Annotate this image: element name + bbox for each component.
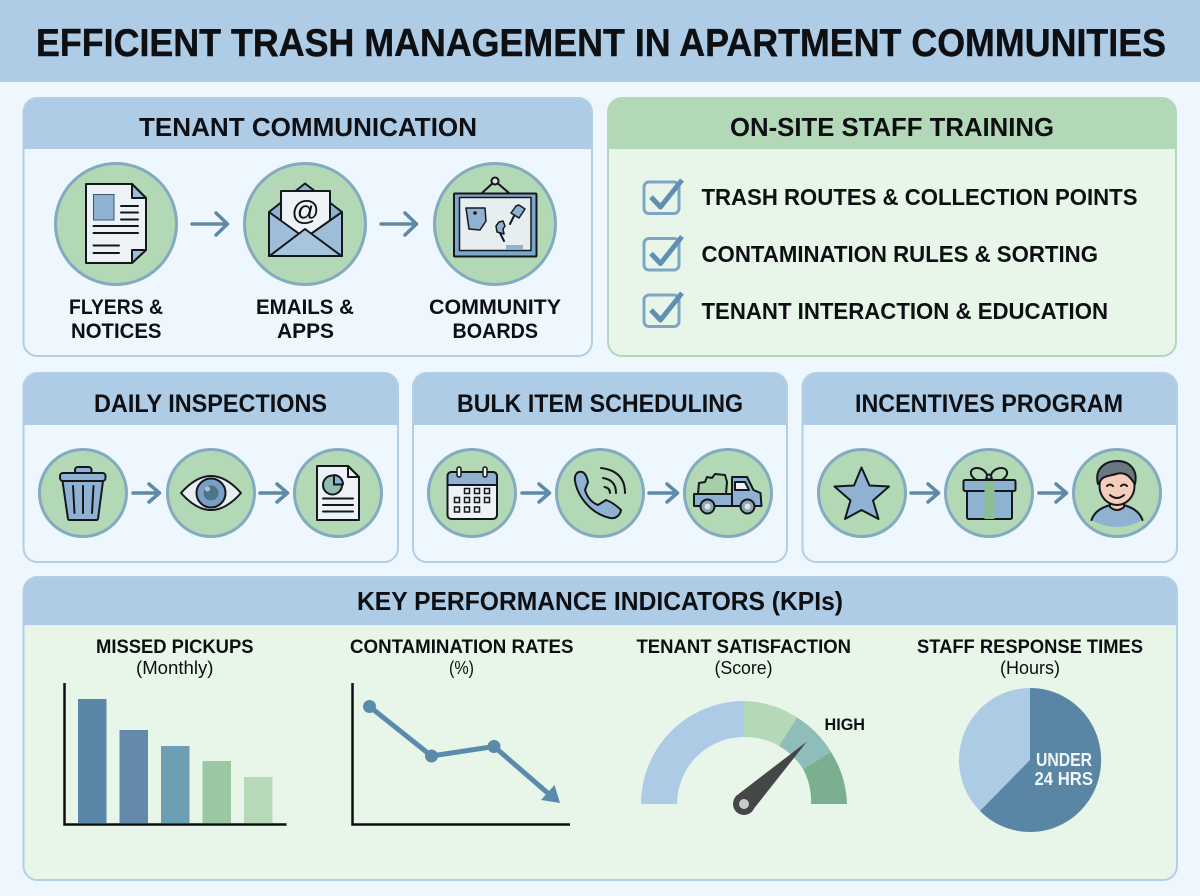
icon: emails and apps: [244, 164, 366, 284]
title banner: [0, 0, 1200, 82]
icon: community boards: [434, 164, 556, 284]
kpi title: tenant satisfaction: TENANT SATISFACTION: [636, 636, 851, 658]
heading: tenant communication: TENANT COMMUNICATION: [139, 112, 477, 142]
checklist item: trash routes: TRASH ROUTES & COLLECTION POINTS: [702, 184, 1138, 210]
icon: phone: [556, 450, 644, 536]
arrow: [522, 484, 550, 502]
heading: on-site staff training: ON-SITE STAFF TRAINING: [730, 112, 1054, 142]
kpi title: tenant satisfaction: (Score): [714, 657, 772, 678]
arrow: [381, 213, 416, 235]
heading: key performance indicators: KEY PERFORMANCE INDICATORS (KPIs): [357, 586, 843, 616]
icon: emails and apps: @: [291, 195, 320, 226]
label: community boards: COMMUNITY: [429, 295, 561, 319]
icon: trash can: [40, 450, 126, 536]
bar chart: missed pickups: [64, 683, 286, 824]
kpi title: missed pickups: MISSED PICKUPS: [96, 636, 254, 658]
arrow: [649, 484, 678, 502]
heading: bulk item scheduling: BULK ITEM SCHEDULING: [457, 390, 743, 418]
panel: on-site staff training: [608, 98, 1176, 356]
checklist item: tenant interaction: TENANT INTERACTION & EDUCATION: [702, 298, 1108, 324]
panel: daily inspections: [24, 373, 398, 562]
arrow: [911, 484, 938, 502]
label: emails and apps: APPS: [277, 319, 334, 343]
panel: incentives program: [802, 373, 1177, 562]
icon: report: [294, 450, 382, 536]
heading: incentives program: INCENTIVES PROGRAM: [855, 390, 1123, 418]
checklist item: trash routes: [644, 180, 1138, 214]
label: emails and apps: EMAILS &: [256, 295, 354, 319]
pie chart: staff response times: UNDER: [1036, 750, 1092, 770]
icon: truck: [684, 450, 772, 536]
kpi title: contamination rates: CONTAMINATION RATES: [350, 636, 574, 658]
label: flyers and notices: NOTICES: [71, 319, 162, 343]
panel: tenant communication: [24, 98, 592, 356]
arrow: [192, 213, 228, 235]
panel: key performance indicators: [24, 577, 1177, 880]
icon: calendar: [428, 450, 516, 536]
kpi title: staff response times: (Hours): [1000, 657, 1060, 678]
heading: daily inspections: DAILY INSPECTIONS: [94, 390, 327, 418]
pie chart: staff response times: 24 HRS: [1034, 769, 1093, 789]
gauge label: HIGH: [824, 715, 865, 734]
arrow: [1039, 484, 1066, 502]
label: community boards: BOARDS: [452, 319, 538, 343]
icon: flyers and notices: [56, 164, 176, 284]
icon: smiling tenant: [1074, 450, 1160, 536]
arrow: [133, 484, 160, 502]
icon: gift: [946, 450, 1032, 536]
icon: eye: [168, 450, 254, 536]
kpi title: staff response times: STAFF RESPONSE TIMES: [917, 636, 1143, 658]
icon: star: [818, 450, 906, 536]
kpi title: contamination rates: (%): [449, 657, 474, 678]
kpi title: missed pickups: (Monthly): [136, 657, 214, 678]
checklist item: contamination rules: CONTAMINATION RULES & SORTING: [702, 241, 1098, 267]
gauge: tenant satisfaction: [641, 701, 865, 815]
checklist item: tenant interaction: [644, 293, 1108, 326]
label: flyers and notices: FLYERS &: [69, 295, 163, 319]
panel: bulk item scheduling: [413, 373, 787, 562]
arrow: [260, 484, 288, 502]
checklist item: contamination rules: [644, 236, 1098, 270]
line chart: contamination rates: [352, 683, 570, 824]
pie chart: staff response times: [959, 688, 1101, 832]
